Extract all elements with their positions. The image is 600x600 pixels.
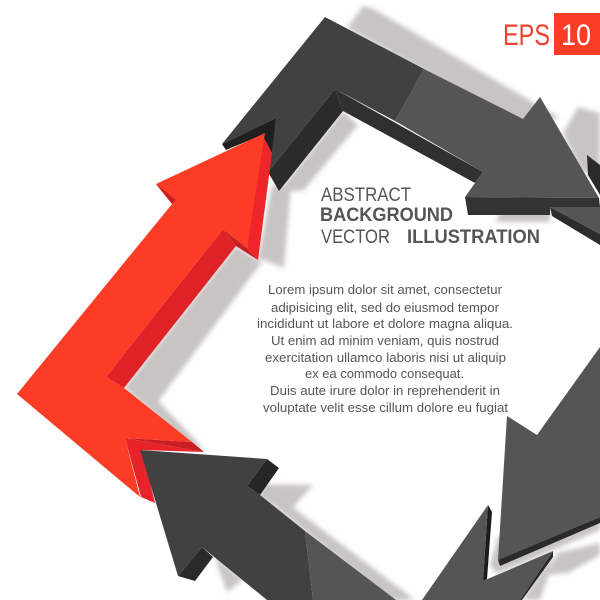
title bbox=[320, 184, 540, 248]
top arrow shaft left side bbox=[268, 89, 343, 191]
top arrow notch side bbox=[222, 118, 276, 160]
top arrow head side bbox=[465, 197, 600, 215]
bottom arrow head side top bbox=[247, 459, 279, 495]
red main face bbox=[17, 133, 265, 497]
right arrow face bbox=[498, 347, 600, 560]
body text: adipisicing elit, sed do eiusmod tempor bbox=[271, 300, 500, 315]
title: VECTOR bbox=[321, 226, 390, 248]
body text: Ut enim ad minim veniam, quis nostrud bbox=[271, 333, 499, 348]
right fragment face bbox=[550, 207, 600, 234]
right fragment side bbox=[550, 207, 600, 245]
top arrow shaft lower side bbox=[335, 89, 483, 183]
body text bbox=[257, 282, 513, 415]
top arrow dark face bbox=[222, 17, 424, 172]
EPS label: EPS bbox=[503, 19, 550, 52]
arrow: right dark bbox=[498, 347, 600, 566]
red head lower side bbox=[223, 229, 258, 260]
bottom arrow head side bottom bbox=[178, 547, 213, 581]
right arrow side bbox=[498, 517, 600, 566]
arrow: right edge fragment bbox=[550, 155, 600, 245]
badge box with 10: 10 bbox=[561, 19, 591, 52]
arrow: bottom dark bbox=[140, 450, 396, 600]
red lower notch sides bbox=[125, 438, 204, 452]
bottom arrow dark face bbox=[140, 450, 313, 600]
body text: ex ea commodo consequat. bbox=[305, 366, 464, 381]
body text: exercitation ullamco laboris nisi ut aliquip bbox=[265, 350, 506, 365]
lower right head sides bbox=[483, 505, 492, 581]
right fragment upper tip bbox=[587, 155, 600, 195]
arrow: red bbox=[17, 133, 272, 503]
title: ILLUSTRATION bbox=[407, 226, 540, 248]
body text: incididunt ut labore et dolore magna aliqua. bbox=[257, 316, 513, 331]
drop shadows bbox=[124, 6, 600, 600]
body text: voluptate velit esse cillum dolore eu fugiat bbox=[263, 400, 508, 415]
badge: EPS 10 bbox=[503, 13, 600, 55]
title: ABSTRACT bbox=[321, 184, 411, 206]
arrow: top dark bbox=[222, 17, 600, 215]
lower right head face bbox=[422, 505, 553, 600]
bottom arrow light face bbox=[305, 531, 396, 600]
red head notch side bbox=[156, 184, 176, 204]
body text: Duis aute irure dolor in reprehenderit in bbox=[270, 383, 500, 398]
red head right side bbox=[247, 134, 272, 260]
body text: Lorem ipsum dolor sit amet, consectetur bbox=[268, 282, 503, 297]
top arrow light face bbox=[395, 69, 599, 198]
red shaft side bbox=[106, 229, 236, 388]
title: BACKGROUND bbox=[320, 204, 453, 226]
arrow: lower right head bbox=[422, 505, 553, 600]
